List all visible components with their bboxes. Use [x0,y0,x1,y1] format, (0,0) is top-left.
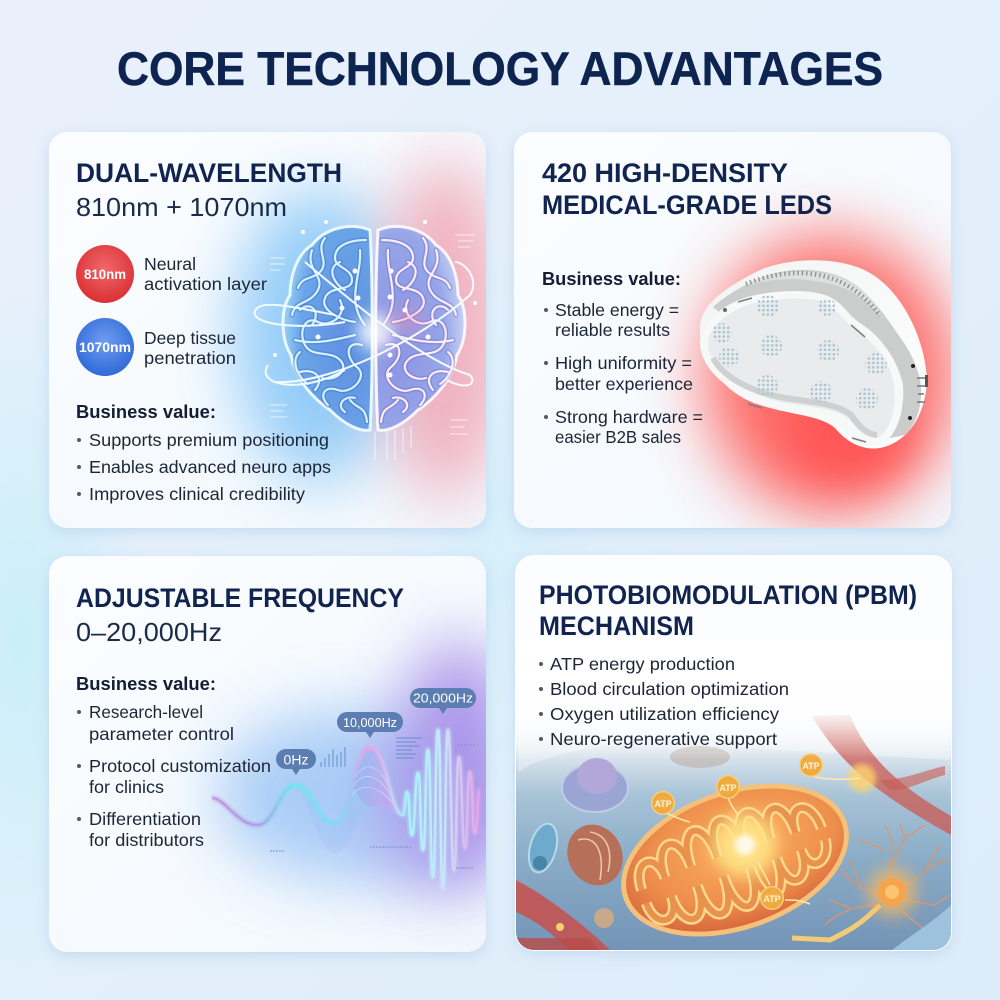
organelle: mitochondrion [621,784,849,936]
label: 0Hz: 0Hz [284,752,308,768]
text: business value: reliable results [555,320,670,340]
heading: PBM mechanism: MECHANISM [539,611,694,641]
text: business value: Protocol customization [89,756,271,776]
icon: 1070nm badge: 1070nm [79,339,131,355]
label: 0Hz [276,749,316,775]
icon: ATP bubbles: ATP [802,761,820,771]
blood vessel: top right [812,715,951,835]
label: 10,000Hz [337,712,403,738]
text: business value [542,268,703,447]
heading: adjustable frequency: ADJUSTABLE FREQUENCY [76,583,404,613]
illustration: cell with mitochondrion [516,715,951,950]
heading: dual-wavelength: 810nm + 1070nm [76,192,287,222]
panel: 420 LEDs [514,132,955,532]
text: mechanism list [539,654,789,749]
text: neural activation layer [144,254,267,294]
label: 20,000Hz [410,688,476,714]
icon: ATP bubbles: ATP [763,894,781,904]
organelle: golgi [567,824,623,886]
text: business value: Research-level [89,702,203,722]
label: 10,000Hz: 10,000Hz [343,715,397,730]
text: mechanism list: Neuro-regenerative support [550,729,777,749]
icon: 1070nm badge [76,318,134,376]
organelle: nucleus [562,758,628,812]
text: neural activation layer: activation layer [144,274,267,294]
text: deep tissue penetration: Deep tissue [144,328,236,348]
heading: PBM mechanism [539,580,917,641]
text: business value: better experience [555,374,693,394]
icon: ATP bubbles: ATP [719,783,737,793]
heading: 420 LEDs: 420 HIGH-DENSITY [542,158,788,188]
text: business value [76,673,271,850]
text: mechanism list: Blood circulation optimization [550,679,789,699]
heading: 420 LEDs: MEDICAL-GRADE LEDS [542,190,832,220]
text: business value [76,401,331,504]
chart: frequency waveform [212,688,480,888]
text: business value: High uniformity = [555,353,692,373]
heading: PBM mechanism: PHOTOBIOMODULATION (PBM) [539,580,917,610]
blood vessel: bottom left [516,880,612,952]
panel: dual-wavelength [49,132,507,532]
text: neural activation layer: Neural [144,254,196,274]
text: business value: easier B2B sales [555,427,681,447]
illustration: glowing brain [255,220,477,460]
icon: ATP bubbles [651,753,823,910]
text: mechanism list: Oxygen utilization efficiency [550,704,779,724]
text: business value: Enables advanced neuro apps [89,457,331,477]
text: business value: for distributors [89,830,204,850]
text: business value: Strong hardware = [555,407,703,427]
text: business value: Business value: [76,401,216,422]
heading: dual-wavelength: DUAL-WAVELENGTH [76,158,342,188]
heading: 420 LEDs [542,158,832,220]
heading: adjustable frequency [76,583,404,647]
neuron [792,825,951,952]
text: mechanism list: ATP energy production [550,654,735,674]
text: business value: Supports premium positioning [89,430,329,450]
text: business value: Business value: [542,268,681,289]
panel: adjustable frequency [49,556,520,956]
label: 20,000Hz: 20,000Hz [413,690,473,706]
icon: 810nm badge: 810nm [84,266,126,282]
icon: ATP bubbles: ATP [654,799,672,809]
text: business value: parameter control [89,724,234,744]
text: business value: Stable energy = [555,300,679,320]
icon: 810nm badge [76,245,134,303]
text: business value: Improves clinical credibility [89,484,305,504]
illustration: LED helmet device [700,260,928,448]
heading: dual-wavelength [76,158,342,222]
text: business value: Business value: [76,673,216,694]
text: business value: Differentiation [89,809,201,829]
text: deep tissue penetration: penetration [144,348,236,368]
heading: adjustable frequency: 0–20,000Hz [76,617,222,647]
title: CORE TECHNOLOGY ADVANTAGES [117,42,883,95]
text: deep tissue penetration [144,328,236,368]
organelle: vesicle [524,746,730,928]
panel: photobiomodulation mechanism [516,556,951,965]
text: business value: for clinics [89,777,164,797]
